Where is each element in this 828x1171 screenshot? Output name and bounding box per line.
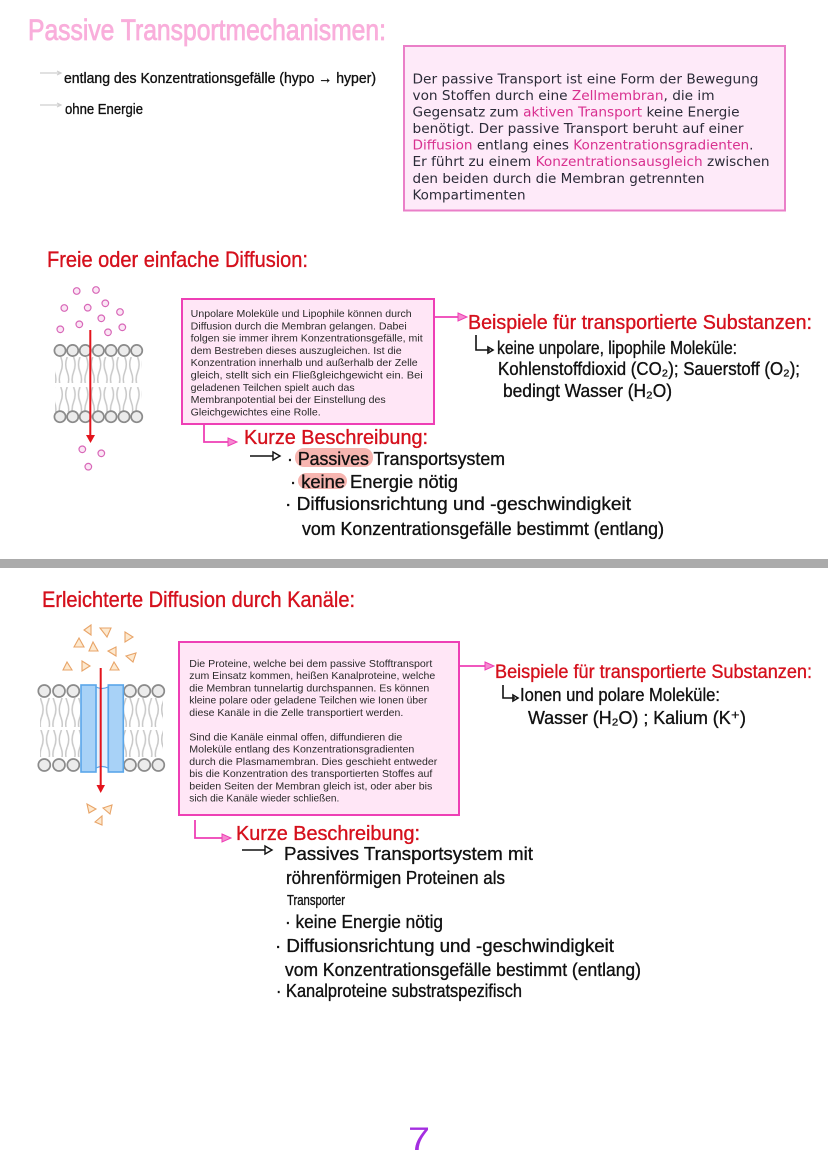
examples: free diffusion: Beispiele für transportierte Substanzen: [468, 312, 812, 334]
panel: free diffusion explanation [182, 299, 434, 424]
short description: channels [236, 823, 641, 1001]
panel: free diffusion explanation: Unpolare Moleküle und Lipophile können durch [191, 309, 412, 320]
panel: free diffusion explanation: Gleichgewichtes eine Rolle. [191, 407, 321, 418]
arrow: to channel short description [195, 820, 231, 842]
panel: channel explanation: bis die Konzentration des transportierten Stoffes auf [189, 769, 432, 780]
short description: free diffusion [244, 427, 664, 539]
short description: channels: Passives Transportsystem mit [284, 844, 533, 864]
short description: free diffusion: vom Konzentrationsgefälle bestimmt (entlang) [302, 519, 664, 539]
panel: free diffusion explanation: dem Bestreben dieses auszugleichen. Ist die [191, 346, 402, 357]
arrow: to channel examples [459, 662, 494, 670]
short description: channels: Kurze Beschreibung: [236, 823, 420, 845]
heading: facilitated diffusion: Erleichterte Diffusion durch Kanäle: [42, 587, 355, 612]
panel: definition: Er führt zu einem Konzentrationsausgleich zwischen [412, 155, 770, 170]
short description: channels: · Kanalproteine substratspezifisch [276, 981, 522, 1001]
title: Passive Transportmechanismen: [28, 14, 386, 47]
panel: definition [404, 46, 785, 210]
short description: free diffusion: Kurze Beschreibung: [244, 427, 428, 449]
heading: free diffusion: Freie oder einfache Diffusion: [47, 247, 308, 272]
panel: definition: von Stoffen durch eine Zellmembran, die im [412, 89, 714, 104]
panel: channel explanation: Moleküle entlang des Konzentrationsgradienten [189, 745, 415, 756]
short description: channels: Transporter [287, 892, 345, 909]
panel: channel explanation: Die Proteine, welche bei dem passive Stofftransport [189, 659, 432, 670]
key points list: entlang des Konzentrationsgefälle (hypo → hyper) [64, 70, 376, 87]
arrow: to short description [204, 424, 237, 446]
examples: free diffusion [468, 312, 812, 401]
panel: channel explanation: diese Kanäle in die Zelle transportiert werden. [189, 708, 403, 719]
panel: definition: benötigt. Der passive Transport beruht auf einer [412, 122, 744, 137]
panel: channel explanation: Sind die Kanäle einmal offen, diffundieren die [189, 732, 403, 744]
panel: free diffusion explanation: gleich, stellt sich ein Fließgleichgewicht ein. Bei [191, 370, 423, 382]
examples: channels [495, 662, 812, 728]
panel: definition: Kompartimenten [412, 188, 526, 203]
examples: free diffusion: Kohlenstoffdioxid (CO₂); Sauerstoff (O₂); [498, 359, 800, 379]
panel: channel explanation: sich die Kanäle wieder schließen. [189, 794, 339, 805]
examples: free diffusion: keine unpolare, lipophile Moleküle: [497, 338, 737, 358]
short description: free diffusion: · Passives Transportsystem [287, 449, 505, 469]
diagram: simple diffusion membrane [54, 287, 142, 470]
page number: 7 [408, 1121, 430, 1157]
panel: free diffusion explanation: Diffusion durch die Membran gelangen. Dabei [191, 321, 407, 332]
panel: channel explanation [179, 642, 459, 815]
panel: free diffusion explanation: folgen sie immer ihrem Konzentrationsgefälle, mit [191, 334, 423, 345]
panel: channel explanation: kleine polare oder geladene Teilchen wie Ionen über [189, 696, 428, 707]
examples: channels: Ionen und polare Moleküle: [520, 685, 720, 705]
panel: free diffusion explanation: Konzentration innerhalb und außerhalb der Zelle [191, 358, 418, 369]
panel: definition: den beiden durch die Membran getrennten [412, 172, 704, 187]
short description: free diffusion: · Diffusionsrichtung und -geschwindigkeit [285, 494, 631, 514]
panel: definition: Gegensatz zum aktiven Transport keine Energie [412, 106, 740, 120]
panel: free diffusion explanation: geladenen Teilchen spielt auch das [191, 383, 355, 394]
panel: definition: Diffusion entlang eines Konzentrationsgradienten . [412, 139, 754, 154]
examples: free diffusion: bedingt Wasser (H₂O) [503, 381, 672, 401]
arrow: to examples [434, 313, 467, 321]
short description: channels: · Diffusionsrichtung und -geschwindigkeit [275, 936, 614, 956]
short description: free diffusion: · keine Energie nötig [290, 472, 458, 492]
short description: channels: · keine Energie nötig [285, 912, 443, 932]
panel: channel explanation: zum Einsatz kommen, heißen Kanalproteine, welche [189, 671, 436, 682]
panel: definition: Der passive Transport ist eine Form der Bewegung [412, 72, 758, 87]
diagram: channel protein membrane [38, 625, 164, 825]
section divider [0, 559, 828, 568]
key points list: ohne Energie [65, 101, 143, 118]
key points list [40, 70, 376, 118]
short description: channels: röhrenförmigen Proteinen als [286, 868, 505, 888]
panel: channel explanation: die Membran tunnelartig durchspannen. Es können [189, 684, 430, 694]
panel: free diffusion explanation: Membranpotential bei der Einstellung des [191, 395, 386, 406]
examples: channels: Wasser (H₂O) ; Kalium (K⁺) [528, 708, 746, 728]
examples: channels: Beispiele für transportierte Substanzen: [495, 662, 812, 683]
panel: channel explanation: durch die Plasmamembran. Dies geschieht entweder [189, 757, 438, 768]
panel: channel explanation: beiden Seiten der Membran gleich ist, oder aber bis [189, 782, 432, 792]
short description: channels: vom Konzentrationsgefälle bestimmt (entlang) [285, 960, 641, 980]
